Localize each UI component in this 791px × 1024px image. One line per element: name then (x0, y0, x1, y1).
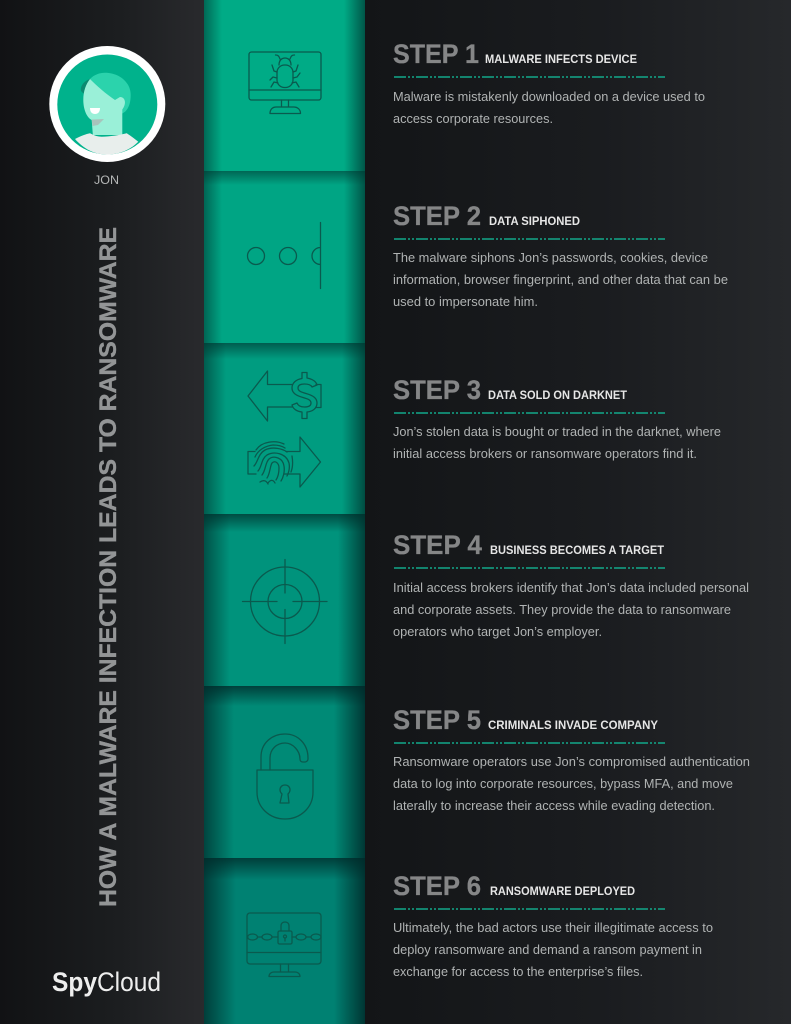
step 6 text: RANSOMWARE DEPLOYED (490, 886, 635, 898)
icon: data siphon dots (248, 222, 320, 288)
name label: JON (94, 173, 119, 187)
step 5 text: Ransomware operators use Jon’s compromised authentication (393, 755, 750, 769)
step 6 text: Ultimately, the bad actors use their illegitimate access to (393, 921, 713, 935)
panel: step 6 icon background (204, 858, 365, 1024)
step 2 text: information, browser fingerprint, and other data that can be (393, 273, 728, 287)
step 2 text: DATA SIPHONED (489, 216, 580, 228)
panel: step 5 icon background (204, 686, 365, 858)
step 1 text (393, 39, 705, 126)
step 3 text (393, 375, 721, 461)
step 5 text: CRIMINALS INVADE COMPANY (488, 720, 658, 732)
step 1 text: access corporate resources. (393, 112, 553, 126)
step 1 text: MALWARE INFECTS DEVICE (485, 54, 637, 66)
step 2 text: STEP 2 (393, 201, 481, 231)
step 1 text: Malware is mistakenly downloaded on a device used to (393, 90, 705, 104)
step 2 text: used to impersonate him. (393, 295, 538, 309)
step 4 text (393, 530, 749, 639)
icon: monitor with chain and lock (247, 913, 321, 976)
step 4 text: STEP 4 (393, 530, 482, 560)
step 3 text: Jon’s stolen data is bought or traded in the darknet, where (393, 425, 721, 439)
step 6 text: exchange for access to the enterprise’s files. (393, 965, 643, 979)
step 4 text: operators who target Jon’s employer. (393, 625, 602, 639)
step 6 text: STEP 6 (393, 871, 481, 901)
panel: step 1 icon background (204, 0, 365, 171)
panel: step 2 icon background (204, 171, 365, 343)
step 4 text: and corporate assets. They provide the data to ransomware (393, 603, 731, 617)
left sidebar (0, 0, 204, 1024)
step 2 text: The malware siphons Jon’s passwords, cookies, device (393, 251, 708, 265)
icon: open padlock (257, 734, 313, 819)
step 5 text: laterally to increase their access while evading detection. (393, 799, 715, 813)
step 6 text: deploy ransomware and demand a ransom payment in (393, 943, 702, 957)
avatar: Jon (49, 46, 165, 162)
vertical title: HOW A MALWARE INFECTION LEADS TO RANSOMWARE (95, 227, 122, 907)
step 6 text (393, 871, 713, 979)
step 5 text: STEP 5 (393, 705, 481, 735)
panel: step 3 icon background (204, 343, 365, 514)
icon: arrows with dollar and fingerprint (248, 371, 321, 487)
step 3 text: initial access brokers or ransomware operators find it. (393, 447, 697, 461)
step 4 text: Initial access brokers identify that Jon’s data included personal (393, 581, 749, 595)
step 1 text: STEP 1 (393, 39, 479, 69)
step 2 text (393, 201, 728, 309)
step 3 text: DATA SOLD ON DARKNET (488, 390, 627, 402)
step 5 text (393, 705, 750, 813)
panel: step 4 icon background (204, 514, 365, 686)
icon: monitor with bug (249, 52, 321, 114)
step 4 text: BUSINESS BECOMES A TARGET (490, 545, 664, 557)
step 3 text: STEP 3 (393, 375, 481, 405)
icon: target crosshair (242, 560, 327, 644)
logo: SpyCloud: SpyCloud (52, 967, 161, 997)
step 5 text: data to log into corporate resources, bypass MFA, and move (393, 777, 733, 791)
